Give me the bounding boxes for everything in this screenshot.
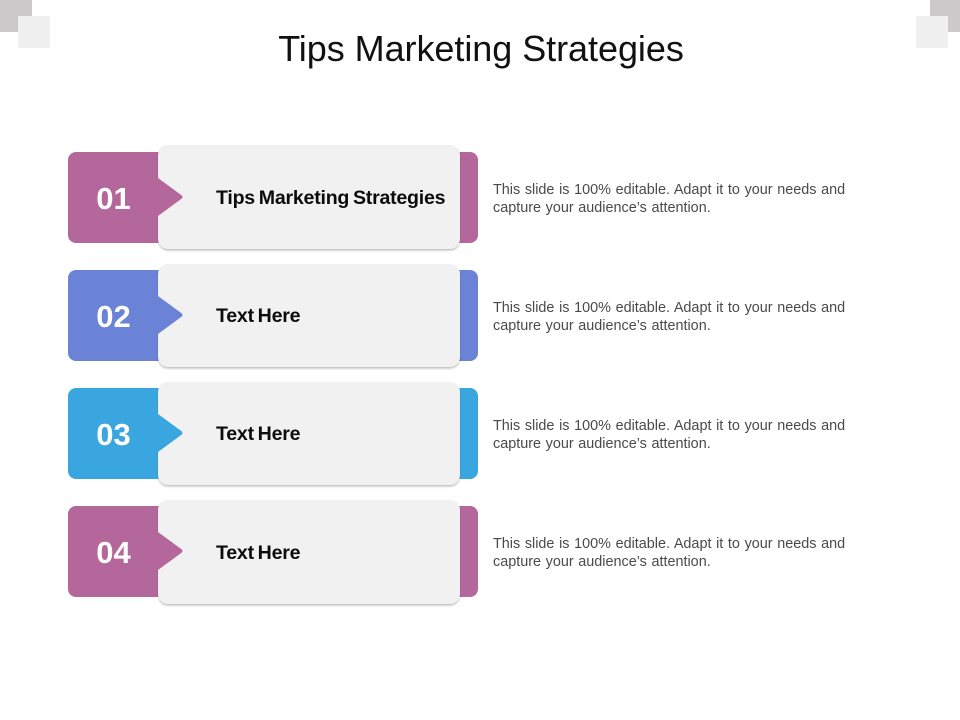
colored bar 04 [68,506,478,597]
panel: row 01 [68,145,478,252]
description 01 [493,182,845,216]
colored bar 02 [68,270,478,361]
description 04: This slide is 100% editable. Adapt it to your needs and [493,536,845,552]
arrow 03 [158,414,182,452]
card 03 [158,382,460,485]
number 01: 01 [96,181,131,216]
label 01: Tips Marketing Strategies [216,187,445,209]
colored bar 03 [68,388,478,479]
description 02: capture your audience’s attention. [493,318,711,334]
panel: row 03 [68,382,478,488]
description 03 [493,418,845,452]
arrow 01 [158,178,182,216]
arrow 04 [158,532,182,570]
description 02 [493,300,845,334]
title: Tips Marketing Strategies [278,28,684,69]
card 04 [158,500,460,604]
description 02: This slide is 100% editable. Adapt it to your needs and [493,300,845,316]
description 04: capture your audience’s attention. [493,554,711,570]
label 02: Text Here [216,305,300,327]
description 03: capture your audience’s attention. [493,436,711,452]
label 04: Text Here [216,542,300,564]
decoration: top right corner squares [916,0,960,48]
description 04 [493,536,845,570]
colored bar 01 [68,152,478,243]
decoration: top left corner squares [0,0,50,48]
number 04: 04 [96,535,131,570]
number 02: 02 [96,299,131,334]
panel: row 02 [68,264,478,370]
panel: row 04 [68,500,478,606]
card 02 [158,264,460,367]
label 03: Text Here [216,423,300,445]
description 01: This slide is 100% editable. Adapt it to your needs and [493,182,845,198]
description 03: This slide is 100% editable. Adapt it to your needs and [493,418,845,434]
description 01: capture your audience’s attention. [493,200,711,216]
arrow 02 [158,296,182,334]
card 01 [158,145,460,249]
number 03: 03 [96,417,131,452]
